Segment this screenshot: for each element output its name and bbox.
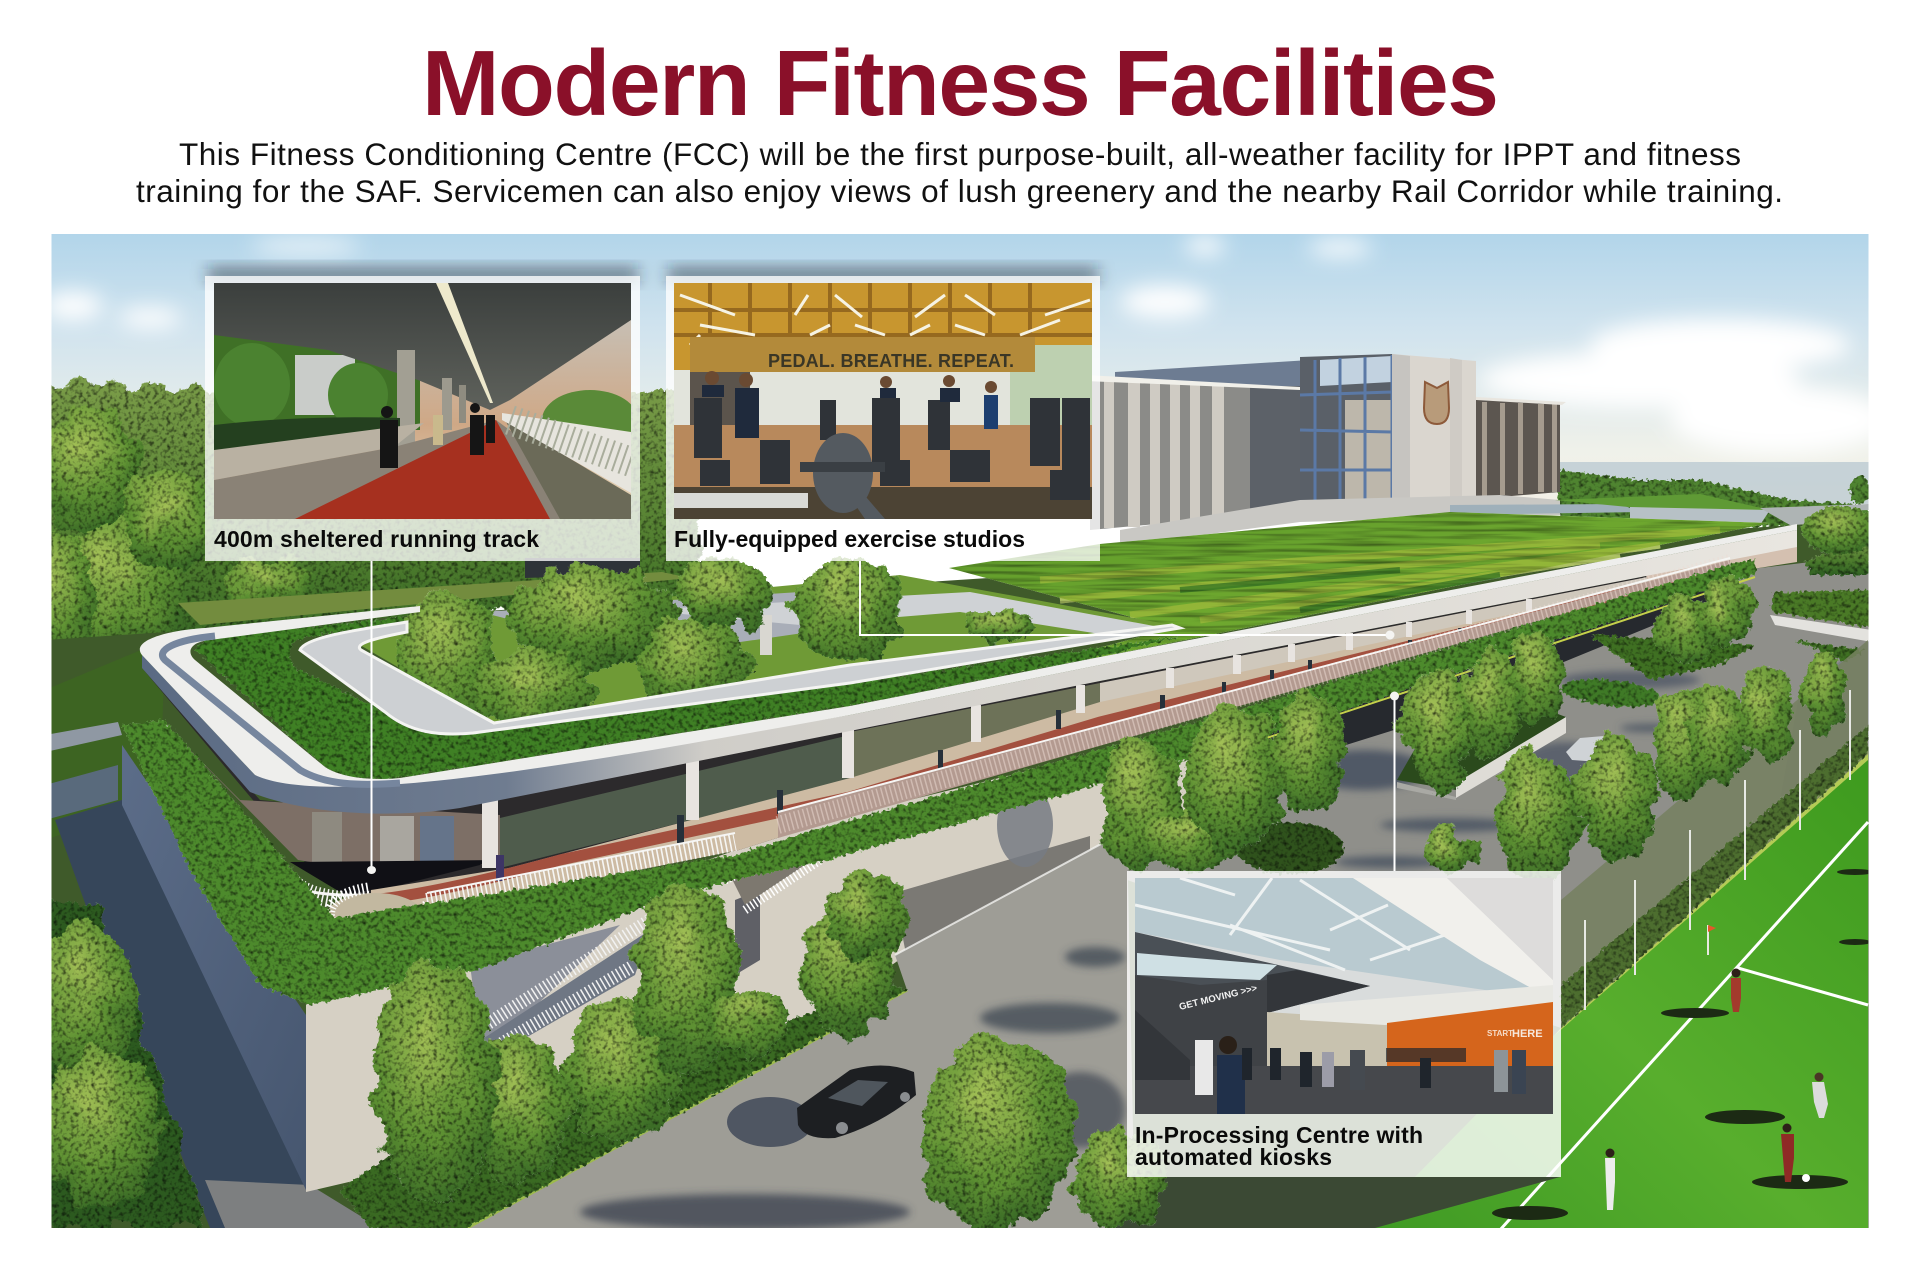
left paths and lawn [45,640,380,1228]
photo: gym studio [674,283,1092,519]
planter curb [1770,615,1872,642]
intro text: training for the SAF. Servicemen can also enjoy views of lush greenery and the nearby Rail Corridor while training. [136,173,1783,209]
walkway railings [165,558,1730,902]
right side trees and planters [1590,506,1878,680]
caption: In-Processing Centre with [1135,1122,1423,1148]
icon: crest emblem [1424,382,1449,424]
intro text [136,136,1783,209]
photo: in-processing hall: START [1487,1029,1513,1038]
ivy lit edge [1224,577,1755,752]
football field [1365,750,1868,1230]
courtyard trees [393,553,1038,734]
caption: 400m sheltered running track [214,526,539,552]
rowing machine [800,433,885,519]
car [727,1065,916,1147]
walkway floor [142,535,1797,912]
cream retaining wall [306,725,1215,1192]
rooftop inner walkway [300,622,1180,734]
intro text: This Fitness Conditioning Centre (FCC) will be the first purpose-built, all-weather facility for IPPT and fitness [179,136,1741,172]
curved roof band [140,524,1797,814]
photo: sheltered running track [214,283,638,519]
spiral stair [327,840,820,937]
lower staircase [481,920,650,1056]
main building [1085,354,1640,546]
columns [482,599,1532,868]
large green roof [949,512,1770,675]
caption: Fully-equipped exercise studios [674,526,1025,552]
foreground trees [373,576,1849,1233]
ivy [122,560,1755,1005]
leader lines [367,561,1399,874]
caption [1135,1122,1423,1170]
road [467,830,1135,1230]
small rear green roof [1556,494,1868,526]
sky [43,234,1890,504]
silver car [1566,736,1604,762]
roadside grass verge [340,985,907,1228]
panel: exercise studios callout [666,276,1100,561]
title: Modern Fitness Facilities [422,31,1499,135]
rooftop planting strip [195,617,1180,779]
panel: in-processing centre callout [1127,871,1561,1177]
panel: running track callout [205,276,640,561]
photo: in-processing hall [1135,878,1553,1115]
courtyard [178,558,1172,723]
people on walkway [496,592,1623,881]
caption: automated kiosks [1135,1144,1332,1170]
photo: in-processing hall: HERE [1512,1028,1543,1040]
wall shadow and gate [470,783,1090,1040]
perimeter fence and hedge [1115,640,1868,1228]
distant trees [1558,470,1870,530]
forest [52,376,704,640]
photo: gym studio: PEDAL. BREATHE. REPEAT. [768,351,1014,371]
slate retaining wall [122,745,306,1190]
panel: aerial rendering of the facility [15,234,1890,1233]
football players [1492,869,1873,1220]
base ground [45,520,1870,1228]
card shadows [208,268,1098,282]
hedge beds and trapezoid planter [1236,675,1662,874]
bottom-left trees [35,900,205,1228]
photo: in-processing hall: GET MOVING >>> [1178,983,1259,1013]
